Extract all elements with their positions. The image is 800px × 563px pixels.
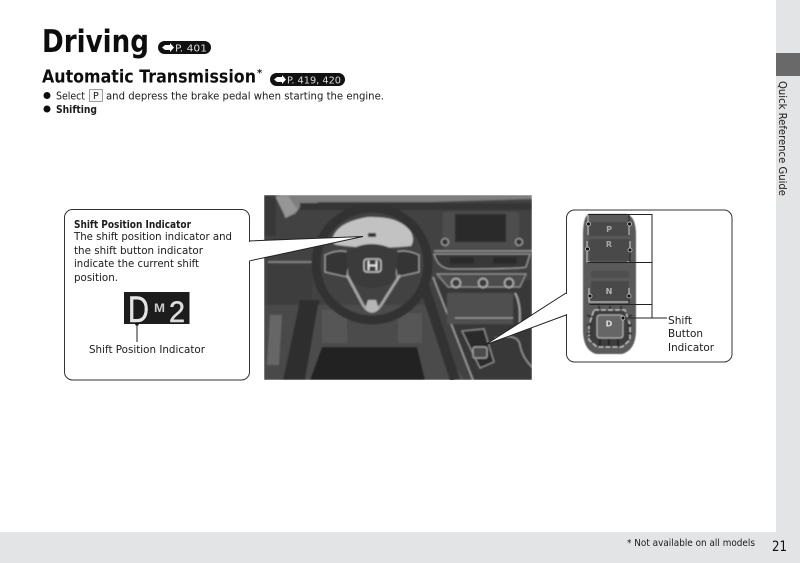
page reference badge: P. 419, 420: P. 419, 420 — [287, 76, 341, 86]
page reference badge: P. 401 — [158, 41, 211, 54]
callout wedge: cluster — [249, 236, 363, 261]
bullet: select P: and depress the brake pedal when starting the engine. — [106, 90, 384, 102]
label: shift button indicator: Indicator — [668, 342, 715, 354]
D button — [597, 315, 623, 338]
selector button letters — [606, 225, 613, 328]
bullet: shifting: Shifting — [56, 104, 97, 116]
page reference badge: P. 419, 420 — [270, 73, 345, 86]
bullet: select P: Select — [56, 90, 85, 102]
indicator caption: Shift Position Indicator — [89, 344, 206, 356]
panel description: the shift button indicator — [74, 245, 204, 257]
selector button letters: R — [606, 240, 612, 249]
footnote: * Not available on all models — [627, 538, 755, 549]
shifter console — [462, 329, 494, 368]
side band — [776, 0, 800, 563]
R button — [589, 239, 630, 261]
bullet: shifting — [44, 104, 97, 116]
heading: Automatic Transmission: Automatic Transmission — [42, 66, 256, 88]
N button — [591, 281, 629, 301]
bullet: select P: P — [93, 91, 99, 102]
dashboard photo — [264, 195, 532, 380]
leader dots — [586, 222, 632, 320]
panel description: indicate the current shift — [74, 258, 199, 270]
windshield strip — [280, 195, 532, 218]
P button — [589, 222, 630, 236]
panel description — [73, 231, 232, 284]
indicator display: D M 2: M — [154, 301, 165, 315]
side label: Quick Reference Guide: Quick Reference Guide — [776, 81, 788, 196]
page reference badge: P. 401: P. 401 — [175, 44, 207, 54]
page number: 21 — [772, 539, 787, 555]
selector button letters: P — [606, 225, 612, 234]
D surround — [589, 310, 630, 347]
screen surround — [443, 212, 519, 249]
panel: shift position indicator — [64, 210, 251, 380]
label: shift button indicator: Button — [668, 328, 703, 340]
panel: shift button indicator — [565, 210, 732, 362]
indicator display: D M 2: 2 — [169, 296, 185, 329]
Honda logo — [364, 259, 381, 272]
label: shift button indicator: Shift — [668, 315, 692, 327]
panel description: position. — [74, 272, 118, 284]
indicator display: D M 2 — [124, 289, 190, 330]
lower footwell — [305, 305, 465, 380]
vent panel — [434, 250, 532, 252]
instrument cluster — [332, 217, 413, 248]
indicator pointer — [135, 322, 139, 342]
selector button letters: N — [606, 287, 612, 296]
callout wedge: shifter — [485, 293, 566, 345]
shift selector illustration — [583, 214, 636, 354]
steering wheel — [316, 208, 428, 320]
label: shift button indicator — [668, 315, 715, 354]
footnote asterisk: * — [257, 68, 263, 79]
selector button letters: D — [606, 320, 613, 328]
panel description: The shift position indicator and — [73, 231, 232, 243]
left dash — [268, 261, 312, 263]
footer band — [0, 532, 800, 563]
indicator display: D M 2: D — [128, 289, 149, 330]
title: Driving: Driving — [42, 24, 149, 60]
white indicator bars — [587, 215, 630, 302]
panel heading: Shift Position Indicator — [74, 219, 192, 231]
center console — [433, 280, 532, 380]
section tab — [776, 53, 800, 76]
leader lines — [588, 214, 667, 318]
climate controls — [437, 274, 526, 287]
